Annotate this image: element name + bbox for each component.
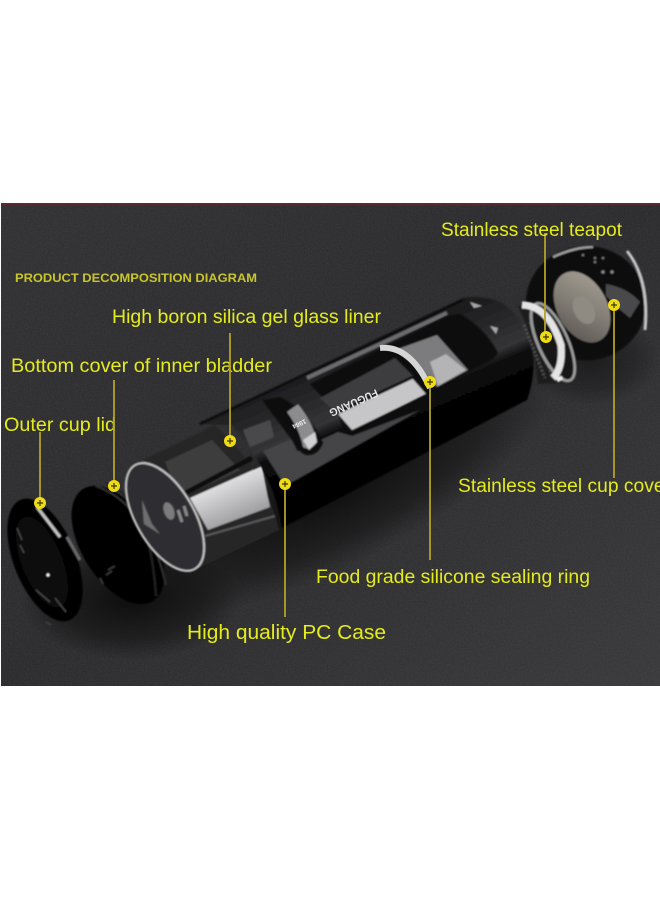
outer cup lid [0,488,98,632]
callout: bottom cover of inner bladder [11,356,273,492]
stainless steel tea strainer ring [518,298,584,386]
model number on case: 1984 [291,417,307,430]
callout: high quality PC case: High quality PC Case [187,622,386,644]
logo text on case: FUGUANG [327,386,380,418]
callout: outer cup lid: Outer cup lid [4,415,116,436]
callout: high boron silica gel glass liner: High boron silica gel glass liner [112,307,382,328]
callout: stainless steel teapot [441,220,623,343]
callout: bottom cover of inner bladder: Bottom cover of inner bladder [11,356,273,377]
callout: outer cup lid [4,415,116,509]
panel: dark leather photo background [1,203,660,686]
silicone sealing ring [380,348,430,388]
bottom cover of inner bladder [52,470,184,620]
title: PRODUCT DECOMPOSITION DIAGRAM [15,273,257,285]
PC case [200,297,533,528]
side window with glass inside [310,314,498,433]
callout: high boron silica gel glass liner [112,307,382,447]
stainless steel cup cover [526,246,646,360]
callout: food grade silicone sealing ring [316,376,590,588]
callout: stainless steel teapot: Stainless steel teapot [441,220,623,241]
small window with label [262,397,323,455]
callout: stainless steel cup cover [458,299,660,497]
callout: food grade silicone sealing ring: Food grade silicone sealing ring [316,567,590,588]
high boron glass liner [110,425,279,583]
callout: high quality PC case [187,478,386,644]
